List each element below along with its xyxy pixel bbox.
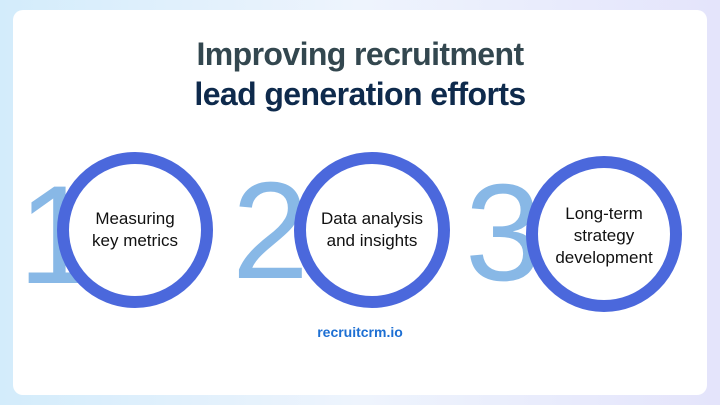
circle 2: and insights (327, 231, 417, 250)
circle 1 (63, 158, 207, 302)
title: lead generation efforts (194, 76, 526, 112)
step 1 (18, 156, 207, 313)
step 3 (465, 156, 676, 310)
footer brand: recruitcrm.io (317, 324, 403, 340)
circle 1: key metrics (92, 231, 178, 250)
circle 1: Measuring (95, 209, 175, 228)
circle 3: Long-term (565, 204, 643, 223)
circle 2: Data analysis (321, 209, 423, 228)
number 2: 2 (232, 154, 309, 308)
circle 2 (300, 158, 444, 302)
number 1: 1 (18, 156, 96, 313)
circle 3: development (555, 248, 653, 267)
circle 3 (532, 162, 676, 306)
title: Improving recruitment (196, 36, 524, 72)
step 2 (232, 154, 444, 308)
circle 3: strategy (574, 226, 635, 245)
title (194, 36, 526, 112)
number 3: 3 (465, 156, 542, 310)
